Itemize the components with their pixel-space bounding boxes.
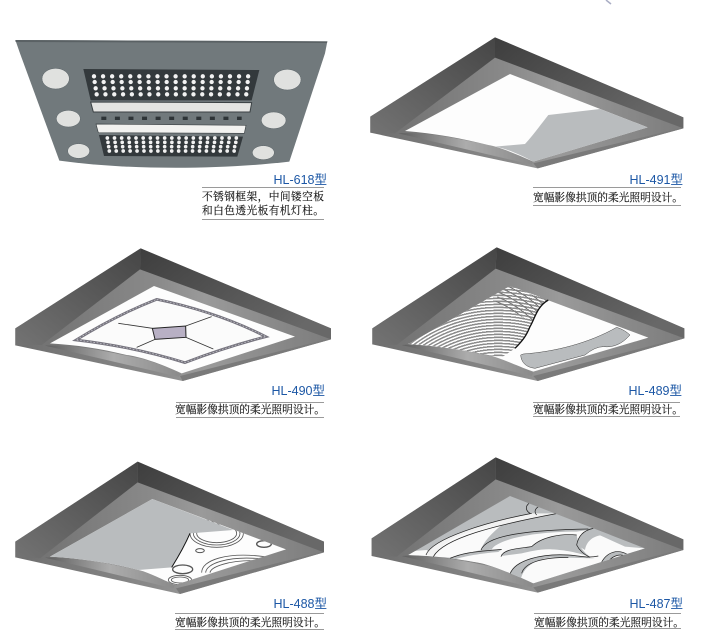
- ceiling HL-489 illustration: [372, 247, 684, 381]
- panel: HL-487: [372, 457, 684, 629]
- ceiling HL-491 illustration: [370, 37, 683, 168]
- upper perforated panel: [83, 69, 259, 100]
- panel: HL-488: [15, 462, 327, 630]
- description HL-487: 宽幅影像拱顶的柔光照明设计。: [534, 616, 684, 629]
- wave pattern: [408, 503, 645, 583]
- panel: HL-618: [15, 40, 327, 220]
- corner mark: [606, 0, 611, 4]
- description HL-489: 宽幅影像拱顶的柔光照明设计。: [533, 403, 683, 416]
- ceiling HL-490 illustration: [15, 248, 331, 381]
- ceiling HL-488 illustration: [15, 462, 324, 594]
- label HL-487: HL-487型: [630, 597, 683, 611]
- label HL-490: HL-490型: [272, 384, 325, 398]
- lower perforated panel: [99, 135, 243, 157]
- description HL-618: 和白色透光板有机灯柱。: [202, 204, 324, 217]
- description HL-488: 宽幅影像拱顶的柔光照明设计。: [175, 616, 325, 629]
- ceiling HL-618 illustration: [15, 40, 327, 168]
- label HL-491: HL-491型: [630, 173, 683, 187]
- lower white bar: [96, 124, 246, 133]
- ceiling HL-487 illustration: [372, 457, 683, 593]
- upper white bar: [91, 102, 252, 112]
- row of small holes: [101, 113, 242, 123]
- centre plate and ribs: [118, 317, 213, 349]
- label HL-489: HL-489型: [628, 384, 682, 398]
- black edge: [172, 533, 190, 567]
- description HL-491: 宽幅影像拱顶的柔光照明设计。: [533, 191, 683, 204]
- label HL-618: HL-618型: [274, 173, 327, 187]
- hatched section: [408, 286, 548, 356]
- description HL-618: 不锈钢框架，中间镂空板: [202, 190, 324, 203]
- decorative border: [76, 299, 266, 363]
- panel: HL-490: [15, 248, 331, 418]
- grey lit section: [50, 499, 233, 570]
- curved black edge: [515, 300, 548, 348]
- panel: HL-491: [370, 37, 683, 206]
- ring pattern: [168, 519, 271, 585]
- panel: HL-489: [372, 247, 684, 416]
- description HL-490: 宽幅影像拱顶的柔光照明设计。: [175, 403, 325, 416]
- label HL-488: HL-488型: [274, 597, 327, 611]
- grey scalloped band: [521, 327, 630, 368]
- round lights: [42, 68, 301, 160]
- grey lit section: [495, 109, 648, 162]
- description HL-618: [202, 188, 324, 220]
